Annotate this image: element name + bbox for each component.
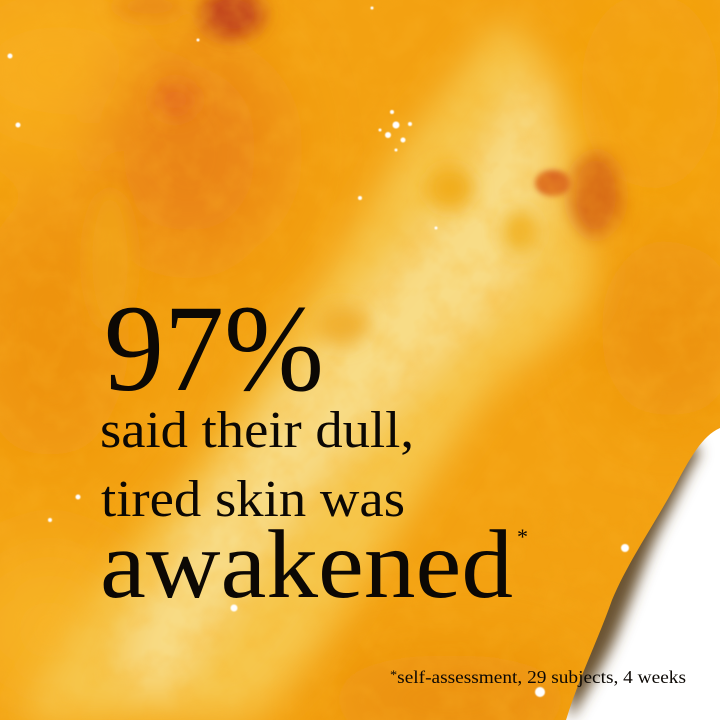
text: said their dull,: said their dull, <box>100 402 414 459</box>
red accents <box>86 0 622 345</box>
pale yellow diagonal band <box>20 20 594 720</box>
footnote: * <box>390 667 397 682</box>
shadow under gel edge <box>560 440 700 720</box>
headline: awakened: awakened <box>100 511 513 618</box>
texture overlay <box>100 0 614 708</box>
headline: 97%: 97% <box>104 280 324 417</box>
orange fleck <box>535 170 571 196</box>
asterisk: * <box>517 524 528 549</box>
text: tired skin was: tired skin was <box>101 471 405 528</box>
footnote: self-assessment, 29 subjects, 4 weeks <box>397 667 686 687</box>
